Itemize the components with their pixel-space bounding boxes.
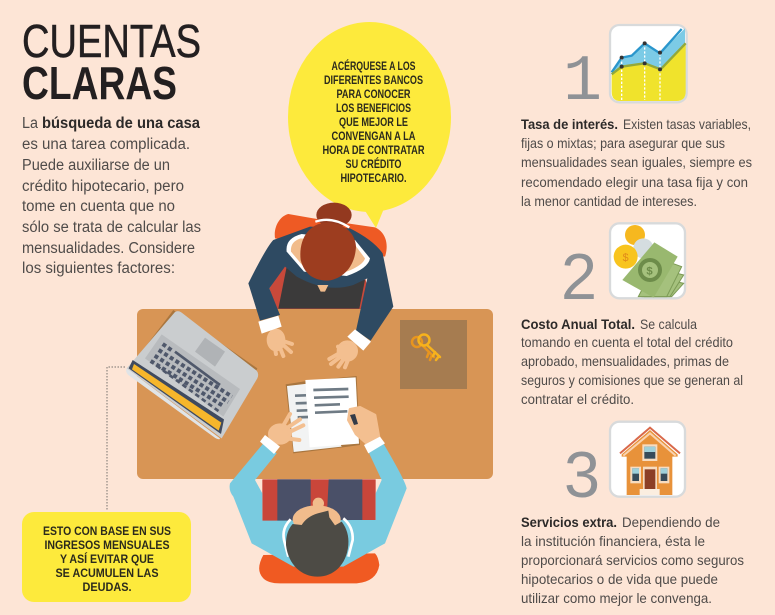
icon: growth chart (610, 25, 687, 102)
intro text: tome en cuenta que no (22, 198, 175, 215)
laptop (126, 310, 258, 439)
head (286, 511, 348, 577)
left hand (270, 414, 303, 443)
text: servicios extra: utilizar como mejor le convenga. (521, 590, 712, 606)
icon: keys (412, 337, 434, 360)
title (22, 15, 201, 109)
man (230, 407, 407, 583)
intro text: sólo se trata de calcular las (22, 219, 201, 236)
text: costo anual total: aprobado, mensualidades, primas de (521, 353, 729, 369)
jacket (248, 227, 393, 341)
woman chair and lower body (269, 214, 387, 310)
text: servicios extra (521, 514, 744, 606)
text: servicios extra: proporcionará servicios como seguros (521, 552, 744, 568)
callout: income note: ESTO CON BASE EN SUS (43, 526, 171, 538)
arms and torso (230, 443, 407, 567)
neck (293, 505, 341, 533)
cuffs (260, 435, 280, 454)
dotted leader line (107, 367, 125, 511)
icon: house (610, 422, 685, 497)
chair (259, 553, 379, 583)
speech bubble: DIFERENTES BANCOS (324, 75, 423, 87)
hair bun (316, 203, 352, 227)
callout: income note: DEUDAS. (82, 582, 132, 594)
text: servicios extra: Dependiendo de (622, 514, 720, 530)
icon: money (610, 223, 685, 298)
text: tasa de interes (521, 116, 752, 209)
text: costo anual total: Se calcula (640, 316, 697, 332)
intro text: Puede auxiliarse de un (22, 157, 170, 174)
documents (286, 376, 360, 453)
speech bubble: SU CRÉDITO (346, 158, 402, 171)
laptop front strip (129, 360, 224, 434)
text: tasa de interes: recomendado elegir una tasa fija y con (521, 174, 748, 190)
callout: income note: Y ASÍ EVITAR QUE (60, 553, 154, 566)
intro text: La (22, 115, 38, 132)
speech bubble: PARA CONOCER (336, 89, 411, 101)
collar (287, 234, 370, 276)
intro text: es una tarea complicada. (22, 136, 190, 153)
intro text: los siguientes factores: (22, 260, 175, 277)
text: costo anual total: tomando en cuenta el total del crédito (521, 334, 733, 350)
intro text (22, 115, 201, 277)
keyboard (151, 344, 232, 412)
text: costo anual total (521, 316, 743, 407)
text: servicios extra: Servicios extra. (521, 514, 617, 530)
hands (269, 331, 356, 367)
speech bubble: ACÉRQUESE A LOS (332, 60, 416, 73)
title: CLARAS (22, 57, 177, 109)
text: servicios extra: la institución financiera, ésta le (521, 533, 705, 549)
legs (262, 479, 376, 521)
number 2: 2 (561, 240, 597, 313)
right hand (348, 407, 379, 443)
speech bubble: CONVENGAN A LA (332, 131, 416, 143)
text: costo anual total: Costo Anual Total. (521, 316, 635, 332)
head (300, 223, 356, 281)
callout: income note: INGRESOS MENSUALES (44, 540, 170, 552)
intro text: búsqueda de una casa (42, 115, 200, 132)
title: CUENTAS (22, 15, 201, 67)
text: costo anual total: seguros y comisiones que se generan al (521, 372, 743, 388)
speech bubble: LOS BENEFICIOS (336, 103, 411, 115)
intro text: mensualidades. Considere (22, 240, 195, 257)
pen (350, 414, 358, 425)
icon: money: $ (623, 252, 629, 264)
intro text: crédito hipotecario, pero (22, 178, 184, 195)
text: tasa de interes: mensualidades sean iguales, siempre es (521, 154, 752, 170)
speech bubble (288, 22, 451, 228)
text: tasa de interes: Existen tasas variables, (623, 116, 751, 132)
text: costo anual total: contratar el crédito. (521, 391, 634, 407)
speech bubble: HIPOTECARIO. (340, 173, 406, 185)
speech bubble: QUE MEJOR LE (339, 117, 408, 129)
number 1: 1 (563, 45, 602, 119)
text: tasa de interes: fijas o mixtas; para asegurar que sus (521, 135, 725, 151)
callout: income note (22, 512, 191, 602)
key tray (400, 320, 467, 389)
cuffs (258, 316, 282, 334)
desk (137, 309, 493, 479)
woman (248, 203, 393, 367)
text: tasa de interes: Tasa de interés. (521, 116, 618, 132)
text: tasa de interes: la menor cantidad de intereses. (521, 193, 697, 209)
text: servicios extra: hipotecarios o de vida que puede (521, 571, 718, 587)
callout: income note: SE ACUMULEN LAS (56, 568, 159, 580)
icon: money: $ (646, 265, 653, 277)
speech bubble: HORA DE CONTRATAR (322, 145, 425, 157)
number 3: 3 (564, 438, 600, 511)
